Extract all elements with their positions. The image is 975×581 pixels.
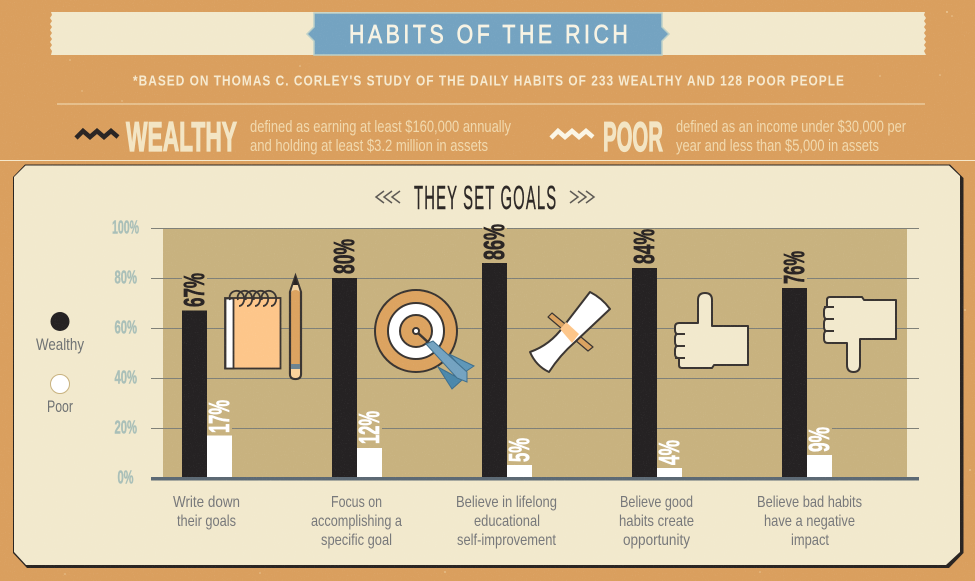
- category label: Believe good: [620, 494, 693, 511]
- bar poor 17%: [207, 436, 232, 477]
- value 86%: 86%: [479, 224, 511, 260]
- legend definition: wealthy: [76, 113, 512, 160]
- panel background: [13, 164, 964, 568]
- banner ribbon: [50, 12, 926, 55]
- bar poor 4%: [657, 468, 682, 477]
- y axis labels: 20%: [114, 418, 137, 438]
- title: HABITS OF THE RICH: [349, 20, 628, 50]
- category label: their goals: [177, 513, 236, 530]
- title plate: [307, 13, 669, 55]
- wealthy definition: [250, 118, 512, 155]
- heading: [376, 181, 594, 217]
- panel: they set goals: [13, 164, 964, 568]
- icon: diploma scroll: [530, 292, 610, 372]
- wealthy definition: defined as earning at least $160,000 annually: [250, 118, 512, 136]
- value 84%: 84%: [629, 229, 661, 264]
- group: focus on a specific goal: [311, 239, 474, 549]
- category label: [619, 494, 694, 549]
- legend: [36, 312, 85, 416]
- wealthy key: Wealthy: [36, 336, 85, 354]
- category label: educational: [474, 513, 540, 530]
- value 76%: 76%: [779, 251, 811, 284]
- y axis labels: 100%: [112, 218, 139, 238]
- y axis labels: 80%: [114, 268, 137, 288]
- y axis labels: [112, 218, 139, 488]
- value 67%: 67%: [179, 273, 211, 307]
- bar poor 9%: [807, 455, 832, 477]
- category label: opportunity: [623, 532, 690, 549]
- category label: Believe in lifelong: [456, 494, 557, 511]
- x axis: [151, 477, 919, 480]
- y axis labels: 60%: [114, 318, 137, 338]
- bar wealthy 80%: [332, 278, 357, 477]
- chart plot area: [163, 228, 907, 477]
- poor definition: [676, 118, 906, 155]
- category label: Focus on: [331, 494, 382, 511]
- category label: self-improvement: [457, 532, 556, 549]
- y axis labels: 40%: [114, 368, 137, 388]
- group: bad habits negative impact: [757, 251, 896, 549]
- category label: [173, 494, 240, 530]
- value 80%: 80%: [329, 239, 361, 274]
- poor definition: year and less than $5,000 in assets: [676, 137, 879, 155]
- category label: Write down: [173, 494, 240, 511]
- category label: habits create: [619, 513, 694, 530]
- poor definition: defined as an income under $30,000 per: [676, 118, 906, 136]
- bar wealthy 67%: [182, 310, 207, 477]
- heading: THEY SET GOALS: [414, 181, 556, 217]
- legend definition: poor: POOR: [603, 113, 663, 160]
- category label: Believe bad habits: [757, 494, 862, 511]
- icon: thumbs up: [675, 293, 748, 368]
- bar poor 12%: [357, 448, 382, 477]
- title banner: [50, 12, 926, 55]
- poor key: Poor: [47, 398, 73, 416]
- bar poor 5%: [507, 465, 532, 477]
- bar chart: [112, 218, 919, 549]
- icon: light zigzag: [551, 131, 593, 138]
- category label: [456, 494, 557, 549]
- icon: right chevrons: [570, 191, 594, 203]
- value 12%: 12%: [354, 411, 386, 444]
- group: lifelong educational self-improvement: [456, 224, 610, 549]
- bar wealthy 84%: [632, 268, 657, 477]
- category label: have a negative: [764, 513, 855, 530]
- value 5%: 5%: [504, 438, 536, 462]
- category label: accomplishing a: [311, 513, 402, 530]
- group: write down their goals: [173, 273, 301, 530]
- icon: left chevrons: [376, 191, 400, 203]
- bar wealthy 76%: [782, 288, 807, 477]
- group: good habits create opportunity: [619, 229, 748, 549]
- icon: notepad and pencil: [225, 276, 301, 379]
- y axis labels: 0%: [118, 468, 134, 488]
- bar wealthy 86%: [482, 263, 507, 477]
- category label: specific goal: [321, 532, 392, 549]
- icon: target and dart: [375, 290, 474, 389]
- value 9%: 9%: [804, 427, 836, 452]
- category label: impact: [791, 532, 829, 549]
- subtitle: *BASED ON THOMAS C. CORLEY'S STUDY OF THE DAILY HABITS OF 233 WEALTHY AND 128 POOR PEOPLE: [133, 72, 844, 89]
- icon: dark zigzag: [76, 131, 118, 138]
- value 17%: 17%: [204, 400, 236, 433]
- category label: [757, 494, 862, 549]
- icon: thumbs down: [824, 297, 896, 372]
- legend definition: poor: [551, 113, 906, 160]
- category label: [311, 494, 402, 549]
- wealthy definition: and holding at least $3.2 million in assets: [250, 137, 488, 155]
- value 4%: 4%: [654, 440, 686, 465]
- wealthy heading: WEALTHY: [126, 113, 237, 160]
